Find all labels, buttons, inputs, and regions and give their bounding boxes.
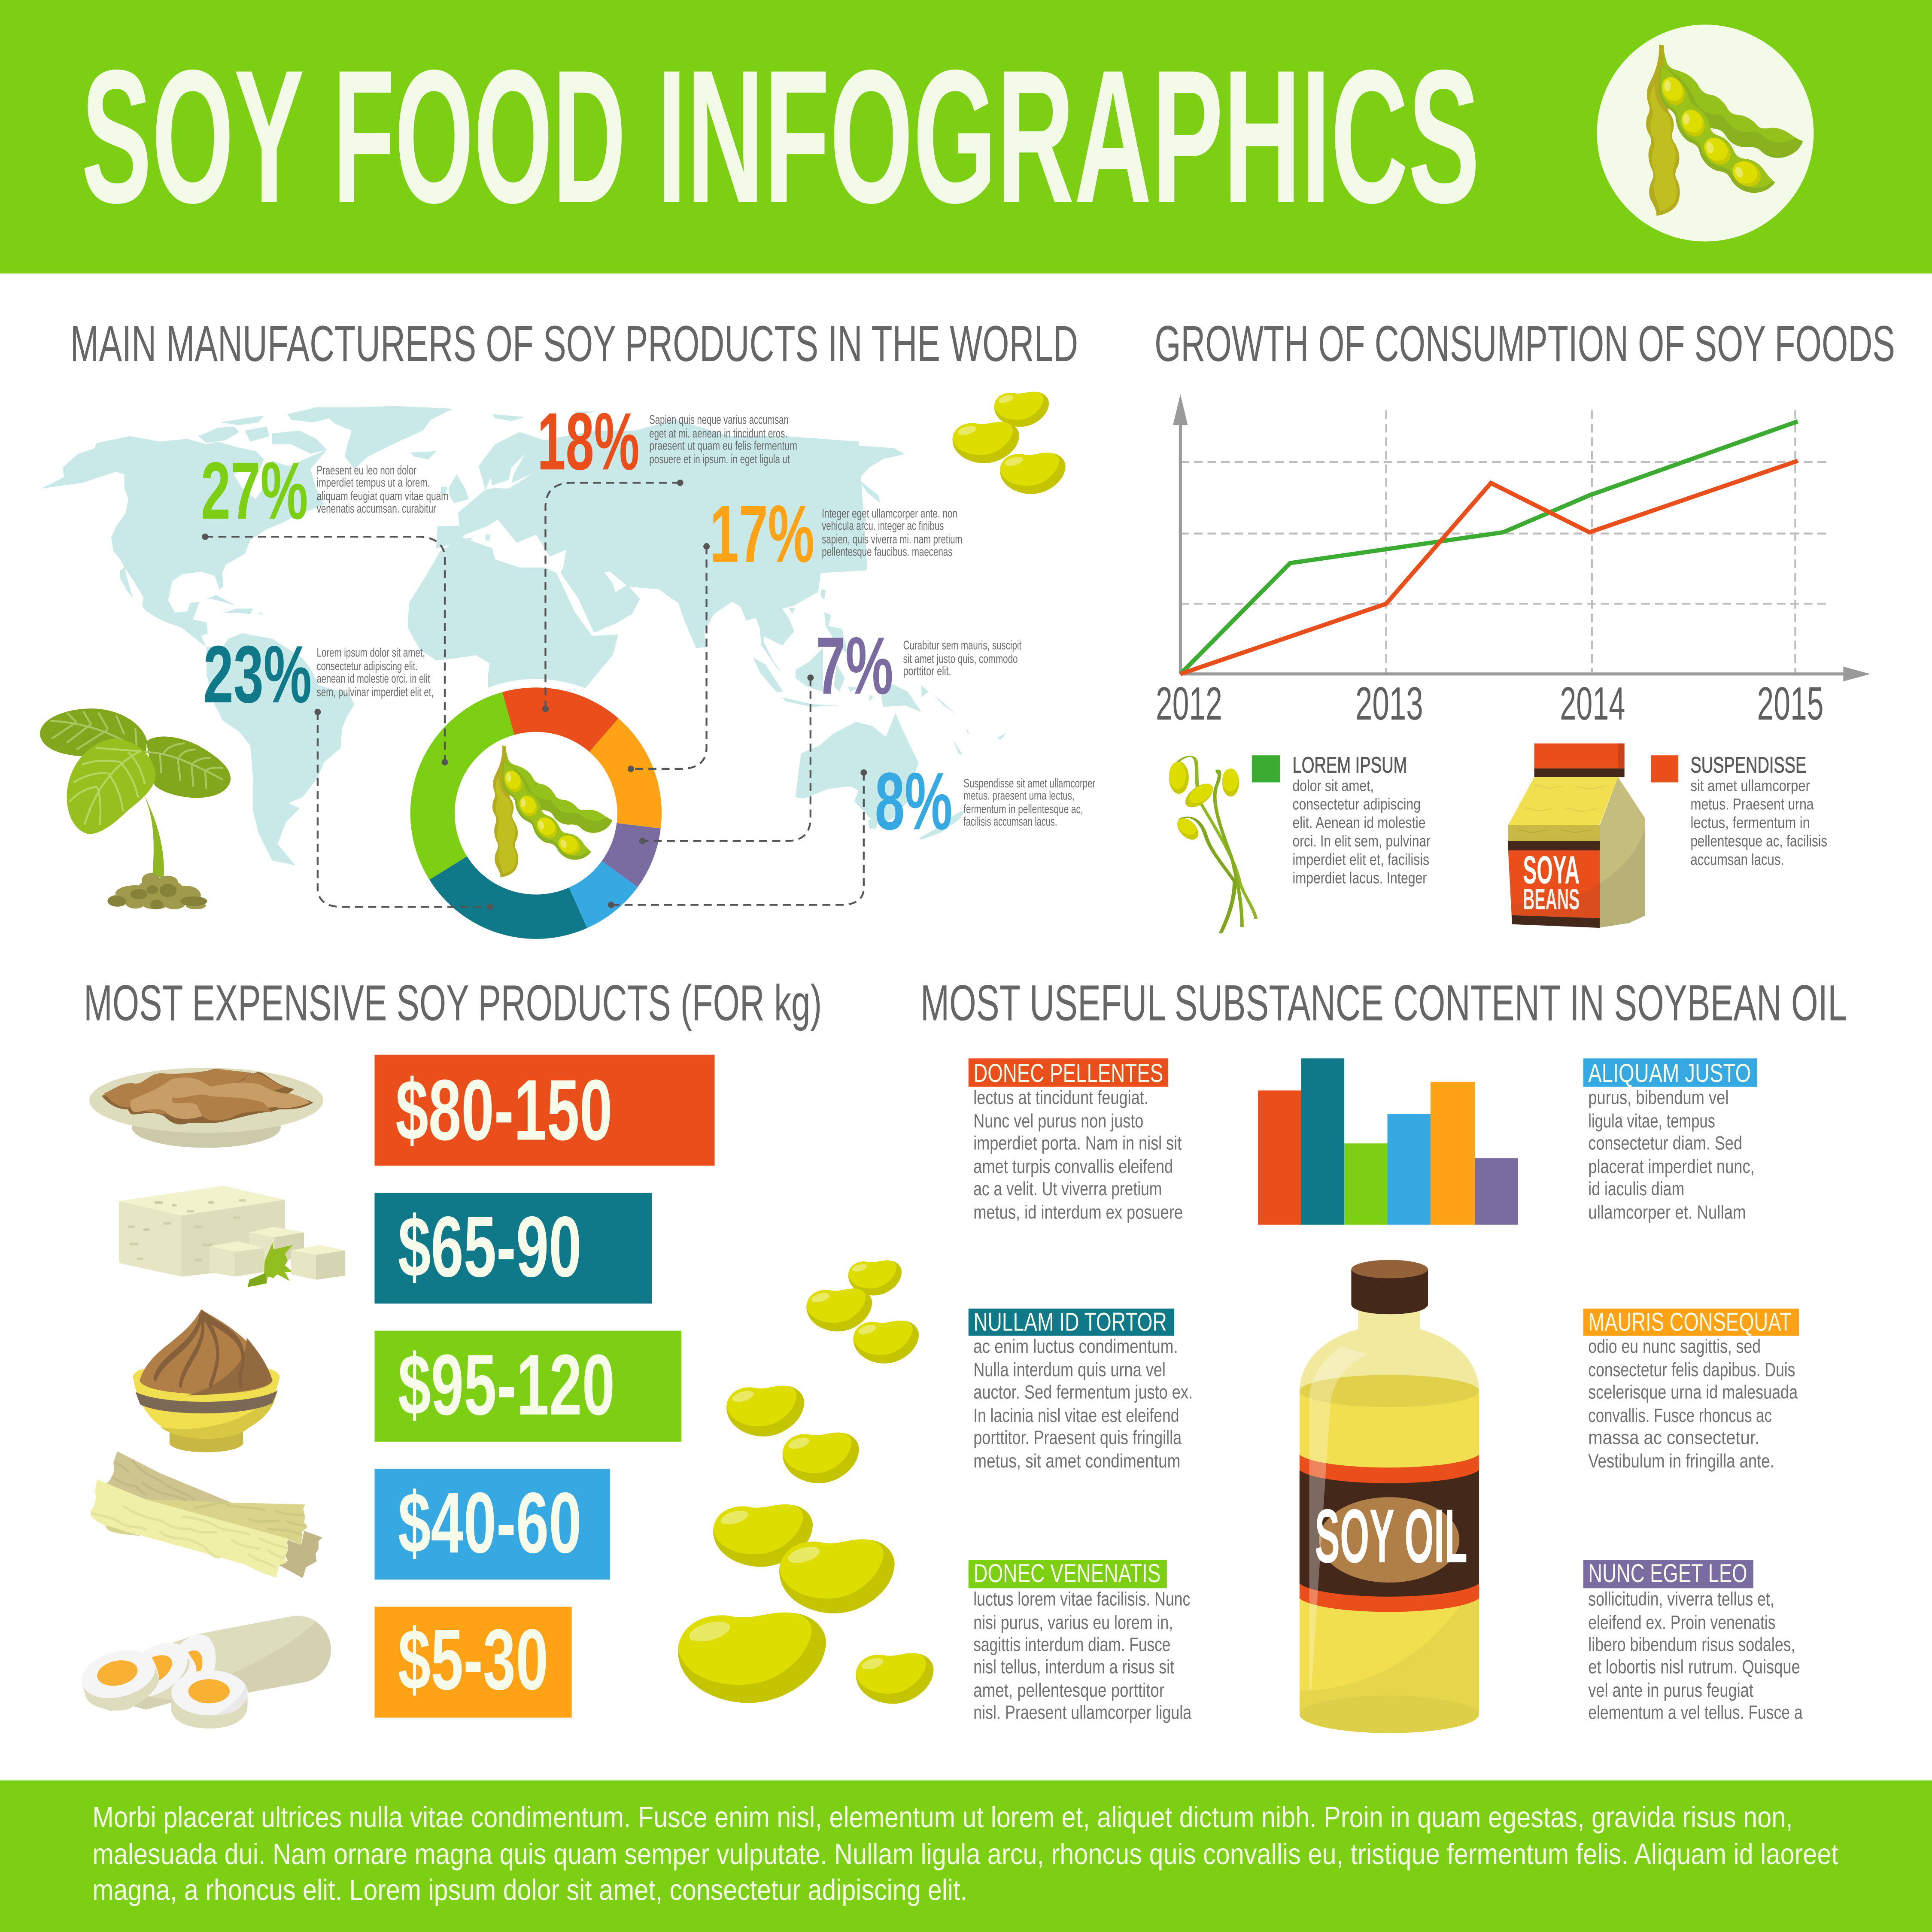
text block: donec pellentes: lectus at tincidunt feugiat. [973, 1087, 1148, 1108]
text block: nullam id tortor: ac enim luctus condimentum. [973, 1336, 1178, 1357]
stat: 17% [710, 489, 962, 580]
icon: soybean sprig [1169, 756, 1256, 933]
text block: aliquam justo [1583, 1058, 1757, 1223]
legend: red square [1651, 755, 1678, 782]
price bar: $40-60 [374, 1469, 610, 1580]
text block: nullam id tortor [969, 1307, 1193, 1472]
stat: 8%: metus. praesent urna lectus, [963, 789, 1075, 803]
icon: soybean pods in circle [1597, 24, 1814, 242]
title: FOOD [333, 30, 626, 243]
text block: aliquam justo: purus, bibendum vel [1588, 1087, 1728, 1108]
text block: donec pellentes: metus, id interdum ex posuere [973, 1202, 1183, 1223]
stat: 7%: porttitor elit. [903, 665, 951, 678]
text block: donec pellentes [969, 1058, 1183, 1223]
stat: 8%: facilisis accumsan lacus. [963, 815, 1057, 829]
stat: 17%: 17% [710, 489, 814, 580]
stat: 27%: 27% [201, 446, 308, 536]
price bar: $5-30: $5-30 [398, 1611, 548, 1708]
legend: lorem ipsum text: elit. Aenean id molestie [1293, 814, 1425, 832]
text block: donec venenatis [969, 1558, 1191, 1723]
line chart: 2015 [1757, 677, 1823, 730]
text block: mauris consequat: Vestibulum in fringilla ante. [1588, 1451, 1774, 1472]
text block: aliquam justo: id iaculis diam [1588, 1179, 1684, 1200]
text block: nunc eget leo: NUNC EGET LEO [1588, 1558, 1747, 1588]
legend: suspendisse text: lectus, fermentum in [1690, 814, 1810, 832]
stat: 27% [201, 446, 449, 536]
text block: nunc eget leo: elementum a vel tellus. Fusce a [1588, 1702, 1803, 1723]
icon: soy oil bottle [1300, 1260, 1479, 1733]
legend: suspendisse text [1691, 752, 1827, 869]
text block: mauris consequat: consectetur felis dapibus. Duis [1588, 1360, 1795, 1381]
stat: 23%: aenean id molestie orci. in elit [317, 672, 430, 686]
text block: nullam id tortor: auctor. Sed fermentum justo ex. [973, 1382, 1193, 1403]
text block: aliquam justo: ullamcorper et. Nullam [1588, 1202, 1746, 1223]
price bar: $80-150: $80-150 [395, 1062, 612, 1158]
heading: most expensive: MOST EXPENSIVE SOY PRODUCTS (FOR kg) [84, 974, 822, 1031]
text block: nunc eget leo: vel ante in purus feugiat [1588, 1680, 1753, 1701]
text block: mauris consequat [1583, 1307, 1799, 1472]
stat: 18%: praesent ut quam eu felis fermentum [649, 439, 797, 453]
stat: 18%: eget at mi. aenean in tincidunt eros. [649, 427, 787, 440]
series: red line [1180, 461, 1798, 674]
footer band with text [0, 1780, 1932, 1932]
text block: aliquam justo: ALIQUAM JUSTO [1588, 1058, 1751, 1088]
bar chart [1258, 1058, 1518, 1225]
legend: suspendisse text: metus. Praesent urna [1690, 795, 1814, 813]
stat: 23%: 23% [204, 629, 312, 720]
stat: 7%: Curabitur sem mauris, suscipit [903, 638, 1021, 652]
icon: seedling [40, 708, 231, 909]
text block: nunc eget leo: sollicitudin, viverra tellus et, [1588, 1589, 1774, 1610]
title [81, 30, 1480, 243]
text block: donec pellentes: ac a velit. Ut viverra pretium [973, 1179, 1162, 1200]
text block: mauris consequat: massa ac consectetur. [1588, 1428, 1759, 1449]
text block: nullam id tortor: In lacinia nisl vitae est eleifend [973, 1405, 1179, 1426]
line chart: 2013 [1355, 677, 1423, 730]
line chart: 2014 [1560, 677, 1625, 730]
stat: 27%: imperdiet tempus ut a lorem. [317, 476, 430, 490]
text block: donec venenatis: nisl tellus, interdum a risus sit [973, 1656, 1175, 1677]
heading: main manufacturers: MAIN MANUFACTURERS OF SOY PRODUCTS IN THE WORLD [70, 315, 1078, 372]
icon: soya beans bag: BEANS [1523, 883, 1580, 916]
price bar: $5-30 [374, 1607, 572, 1718]
text block: donec pellentes: DONEC PELLENTES [973, 1058, 1163, 1088]
stat: 7%: 7% [816, 621, 893, 711]
legend: lorem ipsum text: consectetur adipiscing [1293, 795, 1421, 813]
stat: 18%: 18% [537, 396, 639, 487]
legend: lorem ipsum text: imperdiet elit et, facilisis [1293, 851, 1429, 869]
icon: beans top right [953, 392, 1066, 494]
text block: nunc eget leo: eleifend ex. Proin venenatis [1588, 1612, 1776, 1633]
stat: 8%: fermentum in pellentesque ac, [963, 802, 1083, 816]
text block: mauris consequat: MAURIS CONSEQUAT [1588, 1307, 1792, 1336]
price bar: $40-60: $40-60 [398, 1474, 582, 1571]
header band [0, 0, 1932, 273]
text block: nunc eget leo: libero bibendum risus sodales, [1588, 1634, 1795, 1656]
stat: 7% [816, 621, 1021, 711]
icon: egg roll [76, 1616, 331, 1728]
footer band with text: magna, a rhoncus elit. Lorem ipsum dolor sit amet, consectetur adipiscing elit. [92, 1873, 967, 1906]
text block: aliquam justo: ligula vitae, tempus [1588, 1111, 1715, 1132]
text block: nullam id tortor: porttitor. Praesent quis fringilla [973, 1428, 1182, 1449]
text block: donec pellentes: Nunc vel purus non justo [973, 1111, 1143, 1132]
stat: 18%: Sapien quis neque varius accumsan [649, 413, 789, 427]
line chart: 2012 [1156, 677, 1222, 730]
legend: lorem ipsum text [1293, 752, 1431, 887]
text block: aliquam justo: placerat imperdiet nunc, [1588, 1156, 1755, 1177]
text block: nunc eget leo: et lobortis nisl rutrum. Quisque [1588, 1656, 1800, 1677]
text block: donec venenatis: amet, pellentesque porttitor [973, 1680, 1164, 1701]
legend: lorem ipsum text: orci. In elit sem, pulvinar [1293, 832, 1431, 850]
stat: 17%: sapien, quis viverra mi. nam pretium [822, 533, 962, 547]
legend: lorem ipsum text: dolor sit amet, [1293, 776, 1374, 794]
legend: suspendisse text: sit amet ullamcorper [1690, 776, 1810, 794]
text block: donec venenatis: sagittis interdum diam. Fusce [973, 1634, 1170, 1656]
stat: 27%: Praesent eu leo non dolor [317, 464, 416, 477]
icon: scattered beans [678, 1261, 934, 1704]
text block: donec venenatis: DONEC VENENATIS [973, 1558, 1160, 1588]
icon: tofu [119, 1186, 345, 1287]
legend: lorem ipsum text: imperdiet lacus. Integer [1293, 869, 1427, 887]
icon: yuba sticks [91, 1451, 322, 1578]
text block: donec venenatis: nisl. Praesent ullamcorper ligula [973, 1702, 1191, 1723]
legend: green square [1252, 755, 1280, 782]
icon: meat plate [89, 1068, 323, 1148]
text block: nullam id tortor: Nulla interdum quis urna vel [973, 1360, 1166, 1381]
text block: mauris consequat: odio eu nunc sagittis, sed [1588, 1336, 1761, 1357]
stat: 23%: consectetur adipiscing elit. [317, 659, 418, 673]
stat: 17%: pellentesque faucibus. maecenas [822, 545, 952, 559]
stat: 27%: aliquam feugiat quam vitae quam [317, 489, 449, 503]
stat: 18%: posuere et in ipsum. in eget ligula ut [649, 453, 790, 466]
price bar: $65-90: $65-90 [398, 1198, 582, 1295]
line chart [1156, 394, 1871, 730]
leader dots [202, 480, 867, 910]
series: green line [1180, 422, 1798, 674]
text block: donec venenatis: nisi purus, varius eu lorem in, [973, 1612, 1173, 1633]
title: SOY [81, 30, 304, 243]
text block: aliquam justo: consectetur diam. Sed [1588, 1133, 1742, 1154]
icon: soy oil bottle: SOY OIL [1315, 1493, 1467, 1579]
stat: 17%: Integer eget ullamcorper ante. non [822, 507, 957, 520]
icon: paste bowl [133, 1309, 280, 1452]
text block: nullam id tortor: NULLAM ID TORTOR [973, 1307, 1167, 1336]
stat: 7%: sit amet justo quis, commodo [903, 652, 1018, 666]
stat: 23%: Lorem ipsum dolor sit amet, [317, 646, 425, 660]
text block: nullam id tortor: metus, sit amet condimentum [973, 1451, 1180, 1472]
price bar: $95-120: $95-120 [398, 1337, 615, 1433]
stat: 17%: vehicula arcu. integer ac finibus [822, 519, 944, 533]
legend: suspendisse text: SUSPENDISSE [1690, 752, 1806, 777]
donut chart [402, 679, 670, 948]
text block: donec venenatis: luctus lorem vitae facilisis. Nunc [973, 1589, 1190, 1610]
text block: donec pellentes: imperdiet porta. Nam in nisl sit [973, 1133, 1182, 1154]
stat: 8%: 8% [875, 756, 952, 847]
stat: 8%: Suspendisse sit amet ullamcorper [963, 777, 1096, 790]
stat: 23%: sem, pulvinar imperdiet elit et, [317, 685, 434, 699]
text block: nunc eget leo [1583, 1558, 1803, 1723]
legend: suspendisse text: pellentesque ac, facilisis [1690, 832, 1827, 850]
text block: mauris consequat: convallis. Fusce rhoncus ac [1588, 1405, 1772, 1426]
legend: suspendisse text: accumsan lacus. [1690, 851, 1784, 869]
stat: 18% [537, 396, 797, 487]
world map [41, 406, 1006, 866]
text block: mauris consequat: scelerisque urna id malesuada [1588, 1382, 1798, 1403]
text block: donec pellentes: amet turpis convallis eleifend [973, 1156, 1173, 1177]
stat: 27%: venenatis accumsan. curabitur [317, 502, 436, 516]
icon: soya beans bag: SOYA [1523, 848, 1580, 892]
icon: soya beans bag [1508, 744, 1645, 928]
leader lines [205, 483, 864, 907]
legend: lorem ipsum text: LOREM IPSUM [1293, 752, 1407, 777]
stat: 8% [875, 756, 1096, 847]
